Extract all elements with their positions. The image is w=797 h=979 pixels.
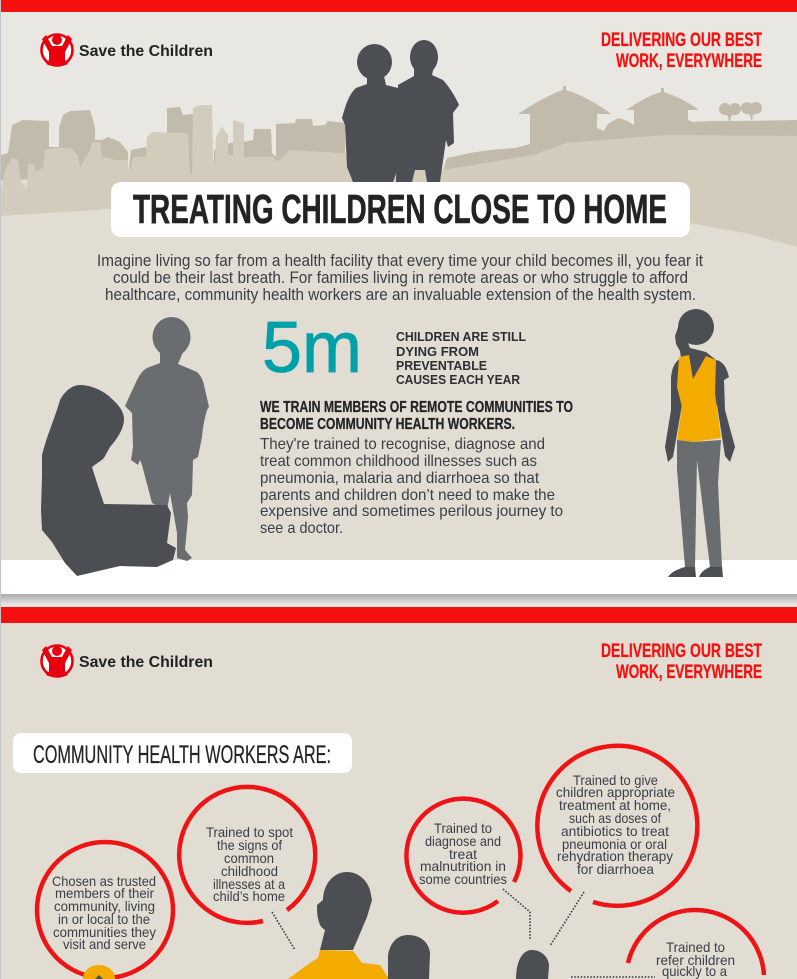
connector: spot signs — [272, 912, 295, 950]
logo: Save the Children — [42, 646, 213, 677]
bubble: trained to spot signs: childhood — [221, 863, 278, 879]
connector: refer children — [571, 976, 655, 978]
top red bar — [1, 0, 797, 12]
stat: 5m: 5m — [262, 308, 362, 388]
bubble: diagnose and treat malnutrition: Trained to — [434, 820, 492, 836]
stat caption: DYING FROM — [396, 344, 479, 359]
icon: trees — [719, 102, 762, 122]
heading: community health workers are: COMMUNITY HEALTH WORKERS ARE: — [33, 741, 331, 769]
body text: parents and children don’t need to make the — [260, 487, 555, 504]
bubble: trained to spot signs: child’s home — [213, 888, 285, 904]
bubble: refer children quickly — [628, 910, 764, 979]
stat caption — [396, 329, 526, 387]
body text: expensive and sometimes perilous journey to — [260, 503, 563, 520]
bubble: refer children quickly: quickly to a — [662, 963, 727, 979]
bubble: trained to spot signs: the signs of — [217, 837, 282, 853]
illustration: standing child — [125, 317, 209, 561]
bubble: appropriate treatment at home: antibiotics to treat — [561, 823, 669, 839]
tagline — [601, 30, 762, 72]
bubble: diagnose and treat malnutrition: treat — [449, 846, 477, 862]
logo: Save the Children — [42, 34, 213, 66]
illustration: city skyline back layer — [1, 107, 345, 180]
intro text: healthcare, community health workers are an invaluable extension of the health system. — [105, 286, 696, 304]
bubble: chosen as trusted members: Chosen as trusted — [52, 873, 156, 889]
connector: malnutrition — [503, 889, 530, 940]
subheading: WE TRAIN MEMBERS OF REMOTE COMMUNITIES TO — [260, 399, 573, 416]
stat caption: CHILDREN ARE STILL — [396, 329, 526, 344]
subheading — [260, 399, 573, 433]
bubble: chosen as trusted members: community, living — [54, 898, 155, 914]
bubble: chosen as trusted members — [37, 842, 173, 977]
bubble: refer children quickly: refer children — [656, 952, 735, 968]
body text — [260, 436, 563, 537]
bubble: appropriate treatment at home: Trained to give — [573, 772, 658, 788]
intro text: could be their last breath. For families living in remote areas or who struggle to afford — [113, 269, 688, 287]
bubble: appropriate treatment at home: rehydration therapy — [557, 848, 673, 864]
bubble: trained to spot signs — [179, 787, 315, 923]
illustration: sitting child — [41, 385, 176, 576]
bubble: diagnose and treat malnutrition — [406, 799, 520, 913]
bubble: refer children quickly: Trained to — [666, 939, 725, 955]
bubble: trained to spot signs: illnesses at a — [213, 876, 285, 892]
bubble: chosen as trusted members: communities they — [53, 924, 156, 940]
title box — [111, 182, 690, 237]
bubble: chosen as trusted members: visit and serve — [63, 936, 146, 952]
body text: They're trained to recognise, diagnose and — [260, 436, 545, 453]
body text: see a doctor. — [260, 520, 343, 537]
bubble: appropriate treatment at home: treatment at home, — [559, 797, 671, 813]
bubble: diagnose and treat malnutrition: diagnose and — [425, 833, 501, 849]
body text: pneumonia, malaria and diarrhoea so that — [260, 470, 540, 487]
bubble: chosen as trusted members: in or local to the — [58, 911, 150, 927]
tagline — [601, 641, 762, 683]
bubble: appropriate treatment at home: children appropriate — [556, 784, 675, 800]
bubble: appropriate treatment at home: for diarrhoea — [577, 861, 654, 877]
logo: Save the Children: Save the Children — [79, 43, 213, 60]
illustration: village houses and back hill — [443, 86, 797, 170]
body text: treat common childhood illnesses such as — [260, 453, 537, 470]
stat caption: CAUSES EACH YEAR — [396, 372, 521, 387]
stat caption: PREVENTABLE — [396, 358, 487, 373]
heading: community health workers are — [13, 733, 352, 773]
bubble: chosen as trusted members: members of their — [55, 885, 154, 901]
illustration: community health worker standing — [665, 309, 735, 577]
second page red bar — [1, 607, 797, 623]
second page background — [1, 623, 797, 979]
intro text: Imagine living so far from a health facility that every time your child becomes ill, you fear it — [97, 252, 703, 270]
subheading: BECOME COMMUNITY HEALTH WORKERS. — [260, 416, 515, 433]
bubble: diagnose and treat malnutrition: malnutrition in — [420, 858, 506, 874]
bubble: diagnose and treat malnutrition: some countries — [419, 871, 507, 887]
bubble: trained to spot signs: Trained to spot — [206, 824, 293, 840]
illustration: third figure head — [516, 950, 549, 979]
illustration: two children silhouette — [342, 40, 459, 182]
illustration: health worker bust — [288, 872, 389, 979]
intro text — [97, 252, 703, 304]
bubble: trained to spot signs: common — [224, 850, 274, 866]
bubble: appropriate treatment at home: such as doses of — [569, 810, 661, 826]
illustration: city skyline front layer and hill — [1, 105, 797, 247]
logo: Save the Children: Save the Children — [79, 654, 213, 671]
connector: treatment at home — [550, 892, 584, 946]
bubble: appropriate treatment at home — [537, 746, 697, 906]
illustration: child head — [388, 935, 430, 979]
bubble: appropriate treatment at home: pneumonia or oral — [562, 836, 667, 852]
icon: yellow figure at bubble base — [83, 965, 115, 979]
